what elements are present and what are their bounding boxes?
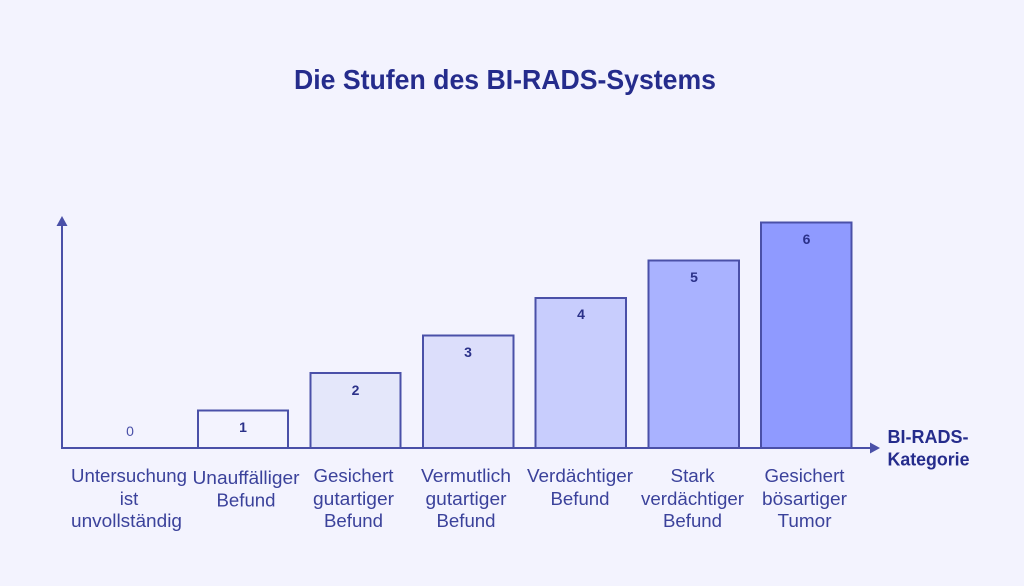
bar: category 2 (310, 373, 400, 448)
label: category 5: verdächtiger (641, 488, 744, 509)
label: category 1: Befund (216, 490, 276, 510)
label: category 2: Befund (324, 510, 383, 531)
axis label: BI-RADS-Kategorie: BI-RADS- (888, 427, 968, 447)
bar: category 3: 3 (464, 344, 472, 360)
bar: category 1: 1 (239, 419, 247, 435)
label: category 0: ist (120, 488, 138, 509)
label: category 0: Untersuchung (71, 465, 187, 486)
title: Die Stufen des BI-RADS-Systems (294, 64, 716, 95)
label: category 6 (762, 465, 847, 531)
label: category 5: Stark (670, 465, 715, 486)
label: category 0: unvollständig (71, 510, 182, 531)
label: category 6: bösartiger (762, 488, 847, 509)
bar: category 4: 4 (577, 306, 585, 322)
bar: category 2: 2 (352, 382, 360, 398)
label: category 1: Unauffälliger (192, 467, 300, 488)
label: category 5 (641, 465, 744, 531)
bar: category 4 (536, 298, 626, 448)
label: category 3 (421, 465, 511, 531)
bar: category 0 value: 0 (126, 423, 134, 439)
bar: category 5: 5 (690, 269, 698, 285)
bar: category 5 (648, 260, 739, 448)
label: category 3: Vermutlich (421, 465, 511, 486)
y axis arrow (56, 216, 68, 448)
x axis arrow (61, 442, 880, 454)
label: category 4: Befund (550, 488, 610, 509)
label: category 4: Verdächtiger (527, 465, 633, 486)
label: category 2: Gesichert (314, 465, 394, 486)
bar: category 3 (423, 336, 514, 448)
axis label: BI-RADS-Kategorie (888, 427, 970, 470)
bar: category 1 (198, 410, 288, 448)
label: category 0 (71, 465, 187, 531)
axis label: BI-RADS-Kategorie: Kategorie (888, 450, 970, 470)
label: category 4 (527, 465, 633, 509)
label: category 5: Befund (663, 510, 722, 531)
label: category 6: Tumor (778, 510, 832, 531)
label: category 6: Gesichert (764, 465, 844, 486)
label: category 1 (192, 467, 300, 510)
label: category 2 (313, 465, 394, 531)
bar chart (126, 222, 852, 448)
label: category 3: Befund (436, 510, 496, 531)
label: category 3: gutartiger (426, 488, 506, 509)
label: category 2: gutartiger (313, 488, 394, 509)
bar: category 6: 6 (803, 231, 811, 247)
bar: category 6 (761, 222, 852, 448)
